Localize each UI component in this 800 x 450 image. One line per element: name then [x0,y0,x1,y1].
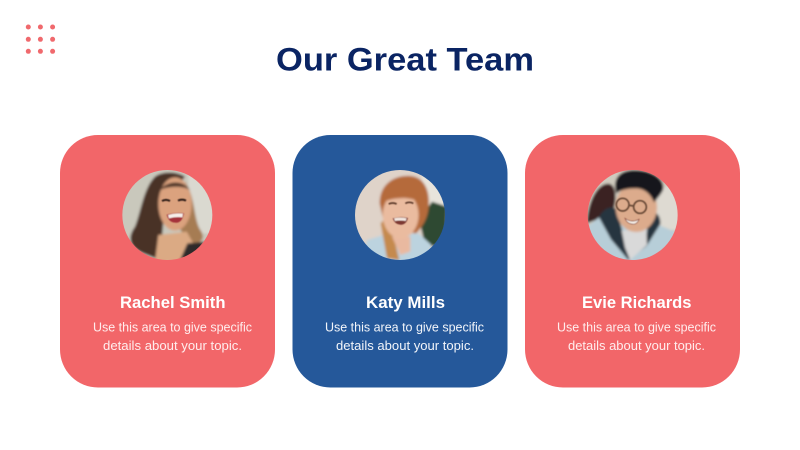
description: Evie Richards: details about your topic. [568,339,705,353]
panel: Katy Mills [292,135,508,388]
name: Evie Richards: Evie Richards [582,294,692,312]
panel: Evie Richards [525,135,740,388]
description: Rachel Smith: details about your topic. [103,339,242,353]
description: Katy Mills: Use this area to give specific [325,320,484,334]
portrait: Evie Richards [588,170,678,260]
name: Rachel Smith: Rachel Smith [120,294,226,312]
dot grid decoration [26,24,55,54]
description: Evie Richards: Use this area to give specific [557,320,716,334]
description: Katy Mills [325,320,484,353]
title: Our Great Team [276,42,534,78]
panel: Rachel Smith [60,135,275,388]
description: Evie Richards [557,320,716,353]
portrait: Rachel Smith [122,170,212,260]
description: Rachel Smith [93,320,252,353]
name: Katy Mills: Katy Mills [366,294,445,312]
portrait: Katy Mills [355,170,445,260]
description: Rachel Smith: Use this area to give specific [93,320,252,334]
description: Katy Mills: details about your topic. [336,339,474,353]
